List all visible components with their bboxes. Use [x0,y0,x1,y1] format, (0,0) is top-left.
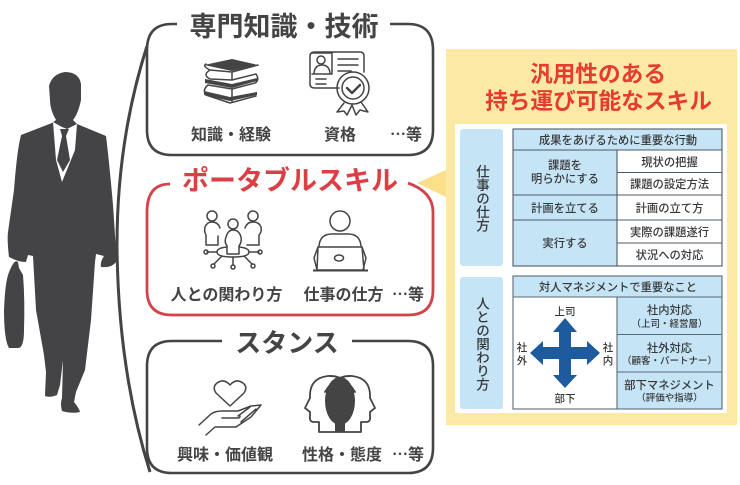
icon: books [204,59,258,103]
panel: portable skills [147,165,433,315]
briefcase [4,261,24,348]
heading: transferable skills [485,61,712,114]
table: important actions: 成果をあげるために重要な行動 [539,133,697,147]
heading: transferable skills: 汎用性のある [530,61,666,87]
table: people management: （上司・経営層） [631,318,708,330]
label: etc: …等 [392,281,424,305]
icon: heart in hand [199,381,261,435]
table: people management: 部下 [554,392,576,405]
label: way of working: 仕事の仕方 [303,285,384,304]
panel: transferable skills [446,49,737,425]
tie [57,129,70,172]
table: people management: 部下マネジメント [624,378,715,392]
table: people management: （顧客・パートナー） [622,355,717,367]
label: personality and attitude: 性格・態度 [302,445,382,464]
heading: portable skills: ポータブルスキル [182,165,398,196]
label: qualifications: 資格 [324,125,356,144]
table: people management: 社外対応 [647,341,693,355]
table: important actions: 実行する [542,236,588,250]
table: important actions: 状況への対応 [636,248,704,262]
panel: specialist knowledge [147,12,433,155]
diagram: four-way arrow [530,318,600,388]
callout pointer [417,170,446,197]
bracket curve [117,46,150,472]
table: people management: 社 [517,341,528,354]
side label: way of working: 仕事の仕方 [474,165,490,234]
table: important actions: 課題を [548,159,582,172]
table: important actions: 現状の把握 [641,155,698,169]
icon: person at laptop [313,211,368,270]
side label: relations with people: 人との関わり方 [474,297,490,393]
table: important actions: 明らかにする [531,172,599,186]
label: etc: …等 [390,121,422,145]
heading: specialist knowledge: 専門知識・技術 [190,12,378,42]
icon: people network [204,211,262,269]
table: people management: 内 [603,354,613,367]
table: people management: 対人マネジメントで重要なこと [539,280,697,294]
side label: relations with people [460,277,503,409]
label: relations with people: 人との関わり方 [171,285,282,304]
side label: way of working [460,129,503,266]
panel: stance [147,328,433,473]
label: interests and values: 興味・価値観 [177,445,273,464]
icon: certificate [310,52,369,115]
table: important actions: 課題の設定方法 [630,177,709,191]
table: important actions [513,129,722,266]
label: knowledge and experience: 知識・経験 [191,125,271,144]
table: important actions: 計画の立て方 [636,201,703,215]
icon: two heads [305,376,375,432]
table: people management: 上司 [554,306,576,318]
table: people management [513,276,722,409]
table: people management: 社 [603,341,614,354]
table: important actions: 実際の課題遂行 [630,225,709,239]
heading: transferable skills: 持ち運び可能なスキル [485,88,712,114]
figure: businessman silhouette [4,72,116,413]
heading: stance: スタンス [235,328,339,358]
table: important actions: 計画を立てる [531,201,599,215]
table: people management: 社内対応 [647,303,693,317]
table: people management: （評価や指導） [636,392,703,404]
shirt [53,122,77,182]
label: etc: …等 [392,441,424,465]
table: people management: 外 [517,354,528,367]
